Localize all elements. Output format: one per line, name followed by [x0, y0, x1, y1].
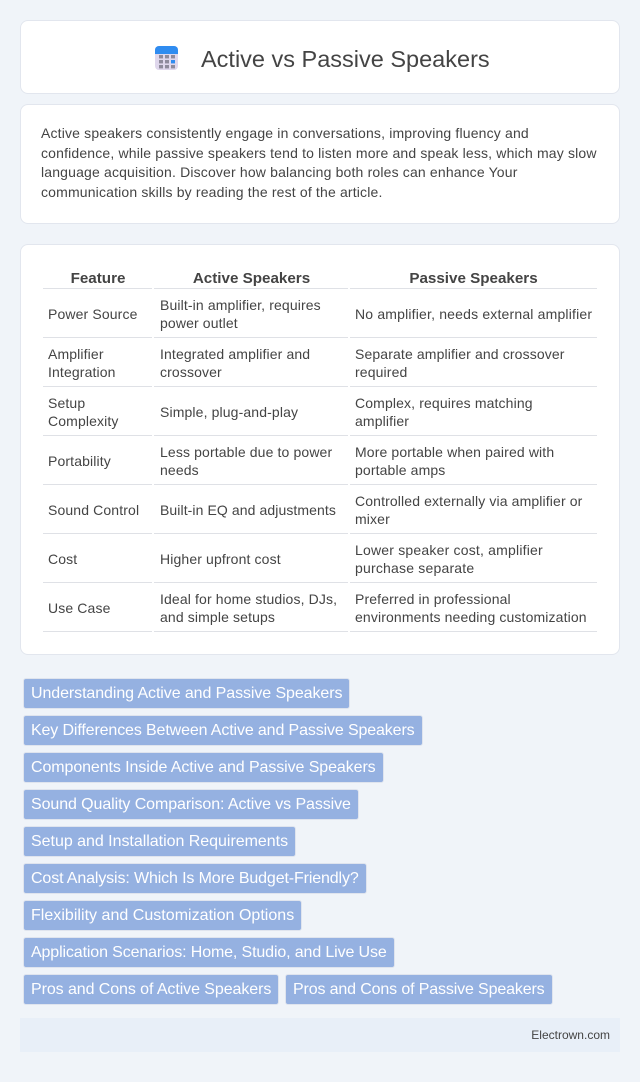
tag: pros and cons active: Pros and Cons of Active Speakers [31, 981, 271, 998]
row: portability [48, 444, 554, 478]
row: amplifier integration: Amplifier [48, 346, 104, 362]
row: setup complexity [48, 395, 533, 429]
icon: calendar [155, 46, 178, 70]
title: Active vs Passive Speakers [201, 46, 490, 72]
intro card [20, 104, 620, 224]
row: cost: purchase separate [355, 560, 474, 576]
row: use case: and simple setups [160, 609, 275, 625]
row: sound control: Sound Control [48, 502, 139, 518]
tag: cost [23, 863, 367, 894]
row: use case: Ideal for home studios, DJs, [160, 591, 337, 607]
intro text: confidence, while passive speakers tend to listen more and speak less, which may slow [41, 144, 597, 160]
row: use case: Preferred in professional [355, 591, 511, 607]
tag: pros and cons passive [285, 974, 553, 1005]
tag: pros and cons passive: Pros and Cons of Passive Speakers [293, 981, 545, 998]
row: setup complexity: Setup [48, 395, 85, 411]
footer [20, 1018, 620, 1052]
row: amplifier integration [48, 346, 565, 380]
row: portability: Less portable due to power [160, 444, 332, 460]
row: portability: needs [160, 462, 199, 478]
row: power source: No amplifier, needs external amplifier [355, 306, 592, 322]
tag: flexibility: Flexibility and Customization Options [31, 907, 294, 924]
row: sound control [48, 493, 582, 527]
row: amplifier integration: crossover [160, 364, 222, 380]
row: cost: Cost [48, 551, 77, 567]
tag: application: Application Scenarios: Home, Studio, and Live Use [31, 944, 387, 961]
row: amplifier integration: Integrated amplifier and [160, 346, 310, 362]
tag: key differences: Key Differences Between Active and Passive Speakers [31, 722, 415, 739]
row: use case: Use Case [48, 600, 111, 616]
row: setup complexity: Complex, requires matching [355, 395, 533, 411]
row: power source: power outlet [160, 315, 238, 331]
row: cost: Higher upfront cost [160, 551, 281, 567]
heading: active speakers: Active Speakers [193, 270, 310, 287]
tag: sound quality [23, 789, 359, 820]
row: power source [48, 297, 592, 331]
tag: sound quality: Sound Quality Comparison: Active vs Passive [31, 796, 351, 813]
row: amplifier integration: Separate amplifier and crossover [355, 346, 565, 362]
heading: passive speakers: Passive Speakers [409, 270, 538, 287]
tag: setup [23, 826, 296, 857]
tag: components: Components Inside Active and Passive Speakers [31, 759, 376, 776]
row: sound control: Built-in EQ and adjustments [160, 502, 336, 518]
intro text [41, 125, 597, 200]
row: portability: More portable when paired with [355, 444, 554, 460]
tag: understanding: Understanding Active and Passive Speakers [31, 685, 342, 702]
tag: application [23, 937, 395, 968]
row: setup complexity: Complexity [48, 413, 119, 429]
row: amplifier integration: required [355, 364, 407, 380]
row: setup complexity: Simple, plug-and-play [160, 404, 298, 420]
tag: flexibility [23, 900, 302, 931]
tag: cost: Cost Analysis: Which Is More Budget-Friendly? [31, 870, 359, 887]
tag: setup: Setup and Installation Requirements [31, 833, 288, 850]
intro text: communication skills by reading the rest of the article. [41, 184, 383, 200]
topic tags [23, 678, 553, 1005]
tag: understanding [23, 678, 350, 709]
intro text: Active speakers consistently engage in conversations, improving fluency and [41, 125, 529, 141]
header card [20, 20, 620, 94]
row: use case: environments needing customization [355, 609, 587, 625]
row: portability: portable amps [355, 462, 445, 478]
comparison table [43, 270, 597, 632]
row: sound control: Controlled externally via amplifier or [355, 493, 582, 509]
row: setup complexity: amplifier [355, 413, 409, 429]
row: sound control: mixer [355, 511, 390, 527]
heading: feature: Feature [71, 270, 125, 287]
tag: key differences [23, 715, 423, 746]
row: use case [48, 591, 587, 625]
row: amplifier integration: Integration [48, 364, 116, 380]
row: portability: Portability [48, 453, 111, 469]
footer credit: Electrown.com [531, 1028, 610, 1042]
row: power source: Built-in amplifier, requires [160, 297, 321, 313]
row: cost [48, 542, 543, 576]
table card [20, 244, 620, 655]
tag: pros and cons active [23, 974, 279, 1005]
intro text: language acquisition. Discover how balancing both roles can enhance Your [41, 164, 518, 180]
tag: components [23, 752, 384, 783]
row: power source: Power Source [48, 306, 138, 322]
row: cost: Lower speaker cost, amplifier [355, 542, 543, 558]
